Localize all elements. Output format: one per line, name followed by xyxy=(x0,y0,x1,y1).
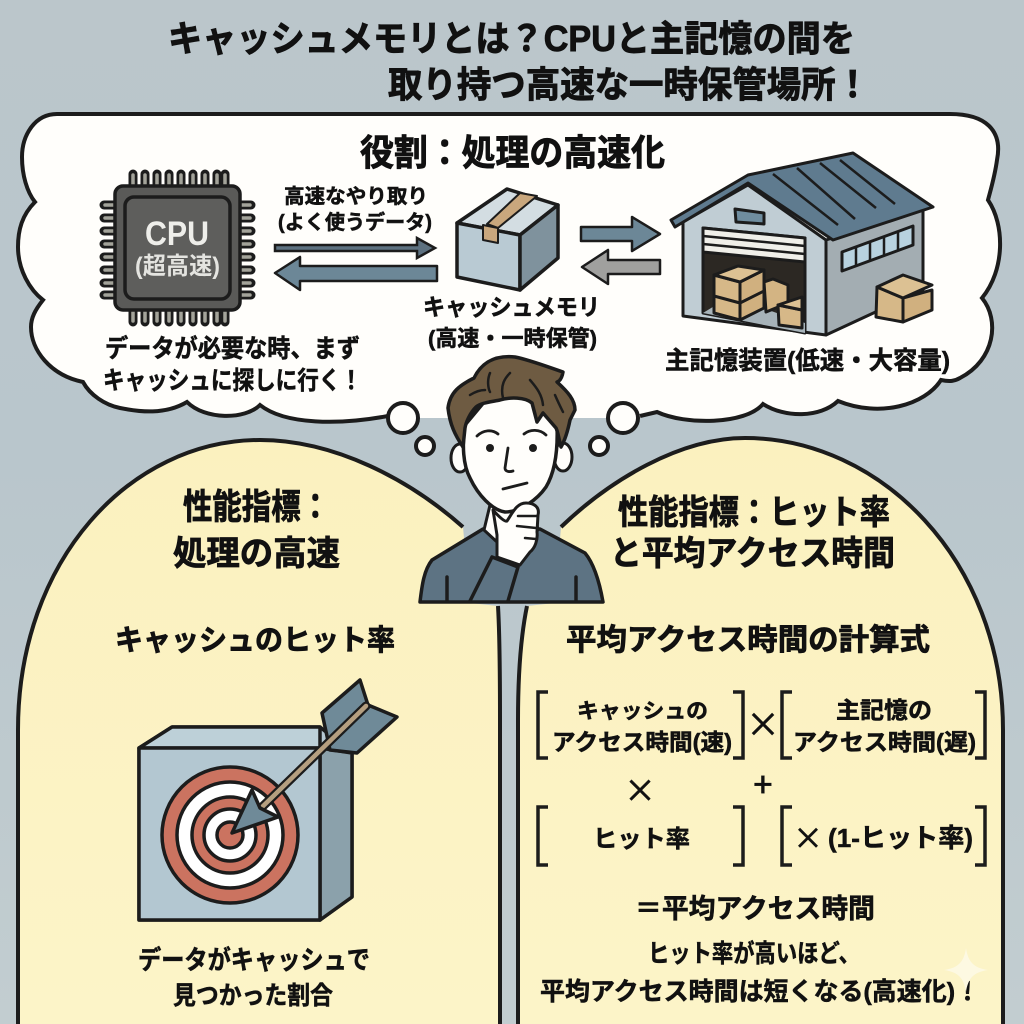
label: main memory: 主記憶装置(低速・大容量) xyxy=(665,347,950,375)
sleeve and folds xyxy=(447,557,576,601)
formula: アクセス時間(速) xyxy=(552,729,732,755)
heading: performance metric right xyxy=(610,494,895,573)
label: fast exchange xyxy=(278,185,432,234)
facial features xyxy=(477,430,546,489)
icon: CPU chip xyxy=(104,174,251,322)
label: cache memory: キャッシュメモリ xyxy=(423,294,600,320)
arrow: cache to CPU xyxy=(275,257,437,290)
icon: sparkle xyxy=(944,948,988,992)
icon: warehouse xyxy=(671,153,933,335)
thought bubbles xyxy=(388,403,638,455)
formula xyxy=(538,692,985,865)
icon: CPU chip: (超高速) xyxy=(135,253,220,280)
text: conclusion: 平均アクセス時間は短くなる(高速化)！ xyxy=(540,978,980,1006)
ears xyxy=(451,443,572,472)
arrow: CPU to cache xyxy=(275,238,435,258)
label: fast exchange: 高速なやり取り xyxy=(284,185,428,208)
body xyxy=(420,529,603,602)
label: cache memory xyxy=(423,294,600,351)
panel: thought cloud xyxy=(18,114,1000,422)
heading: role: 役割：処理の高速化 xyxy=(360,132,665,173)
text: result: ＝平均アクセス時間 xyxy=(635,894,875,924)
formula: ヒット率 xyxy=(593,826,690,853)
title: 取り持つ高速な一時保管場所！ xyxy=(388,64,870,105)
text: CPU note xyxy=(103,334,362,395)
text: hit rate definition: データがキャッシュで xyxy=(138,945,370,975)
arrow: storage to cache xyxy=(582,250,660,284)
formula: + xyxy=(753,758,773,807)
heading: performance metric right: と平均アクセス時間 xyxy=(610,535,895,573)
title xyxy=(168,18,870,105)
neck xyxy=(484,505,538,545)
text: conclusion xyxy=(540,939,980,1006)
formula: × xyxy=(624,766,656,812)
formula: (1-ヒット率) xyxy=(828,823,973,853)
formula: 主記憶の xyxy=(836,697,932,723)
text: conclusion: ヒット率が高いほど、 xyxy=(648,939,860,968)
formula: × xyxy=(793,814,823,858)
panel: average access time xyxy=(518,438,1003,1024)
label: fast exchange: (よく使うデータ) xyxy=(278,210,432,234)
label: cache memory: (高速・一時保管) xyxy=(428,326,597,351)
arrow: cache to storage xyxy=(581,217,660,251)
person thinking xyxy=(420,357,603,602)
text: CPU note: データが必要な時、まず xyxy=(105,334,360,363)
hair strands xyxy=(470,373,563,412)
heading: performance metric left: 性能指標： xyxy=(183,488,330,527)
heading: performance metric right: 性能指標：ヒット率 xyxy=(618,494,890,532)
panel: hit rate xyxy=(18,440,500,1024)
icon: CPU chip: CPU xyxy=(145,215,209,253)
formula: キャッシュの xyxy=(577,700,708,723)
formula: アクセス時間(遅) xyxy=(793,729,976,755)
text: CPU note: キャッシュに探しに行く！ xyxy=(103,367,362,395)
text: hit rate definition: 見つかった割合 xyxy=(173,982,333,1010)
formula: × xyxy=(746,698,780,747)
hand on chin xyxy=(493,503,538,565)
face xyxy=(463,395,557,512)
text: hit rate definition xyxy=(138,945,370,1010)
icon: target with arrow xyxy=(139,680,397,920)
heading: cache hit rate: キャッシュのヒット率 xyxy=(115,624,395,657)
heading: formula: 平均アクセス時間の計算式 xyxy=(566,624,930,657)
icon: cache box xyxy=(457,189,558,290)
hair xyxy=(448,357,575,447)
heading: performance metric left: 処理の高速 xyxy=(173,535,340,573)
title: キャッシュメモリとは？CPUと主記憶の間を xyxy=(168,18,855,59)
heading: performance metric left xyxy=(173,488,340,573)
